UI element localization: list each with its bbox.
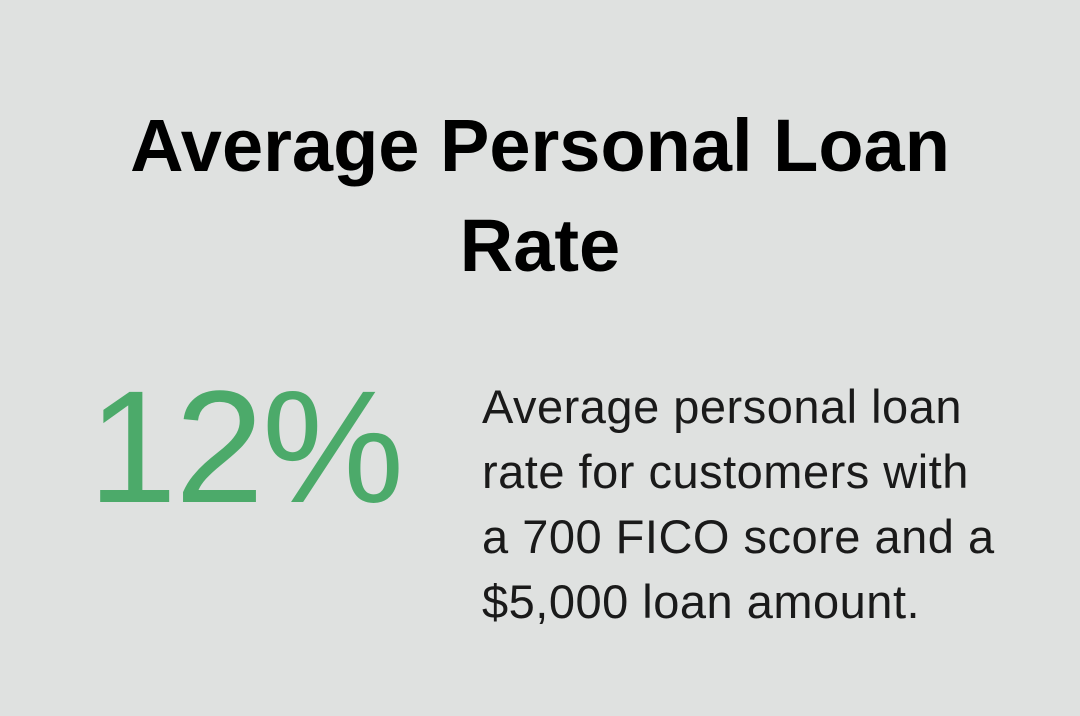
description text: a 700 FICO score and a [482, 510, 995, 563]
description text [482, 380, 995, 628]
title [130, 104, 950, 287]
description text: Average personal loan [482, 380, 962, 433]
stat: 12%: 12% [88, 357, 402, 536]
title: Rate [460, 204, 620, 287]
title: Average Personal Loan [130, 104, 950, 187]
description text: $5,000 loan amount. [482, 575, 920, 628]
description text: rate for customers with [482, 445, 969, 498]
